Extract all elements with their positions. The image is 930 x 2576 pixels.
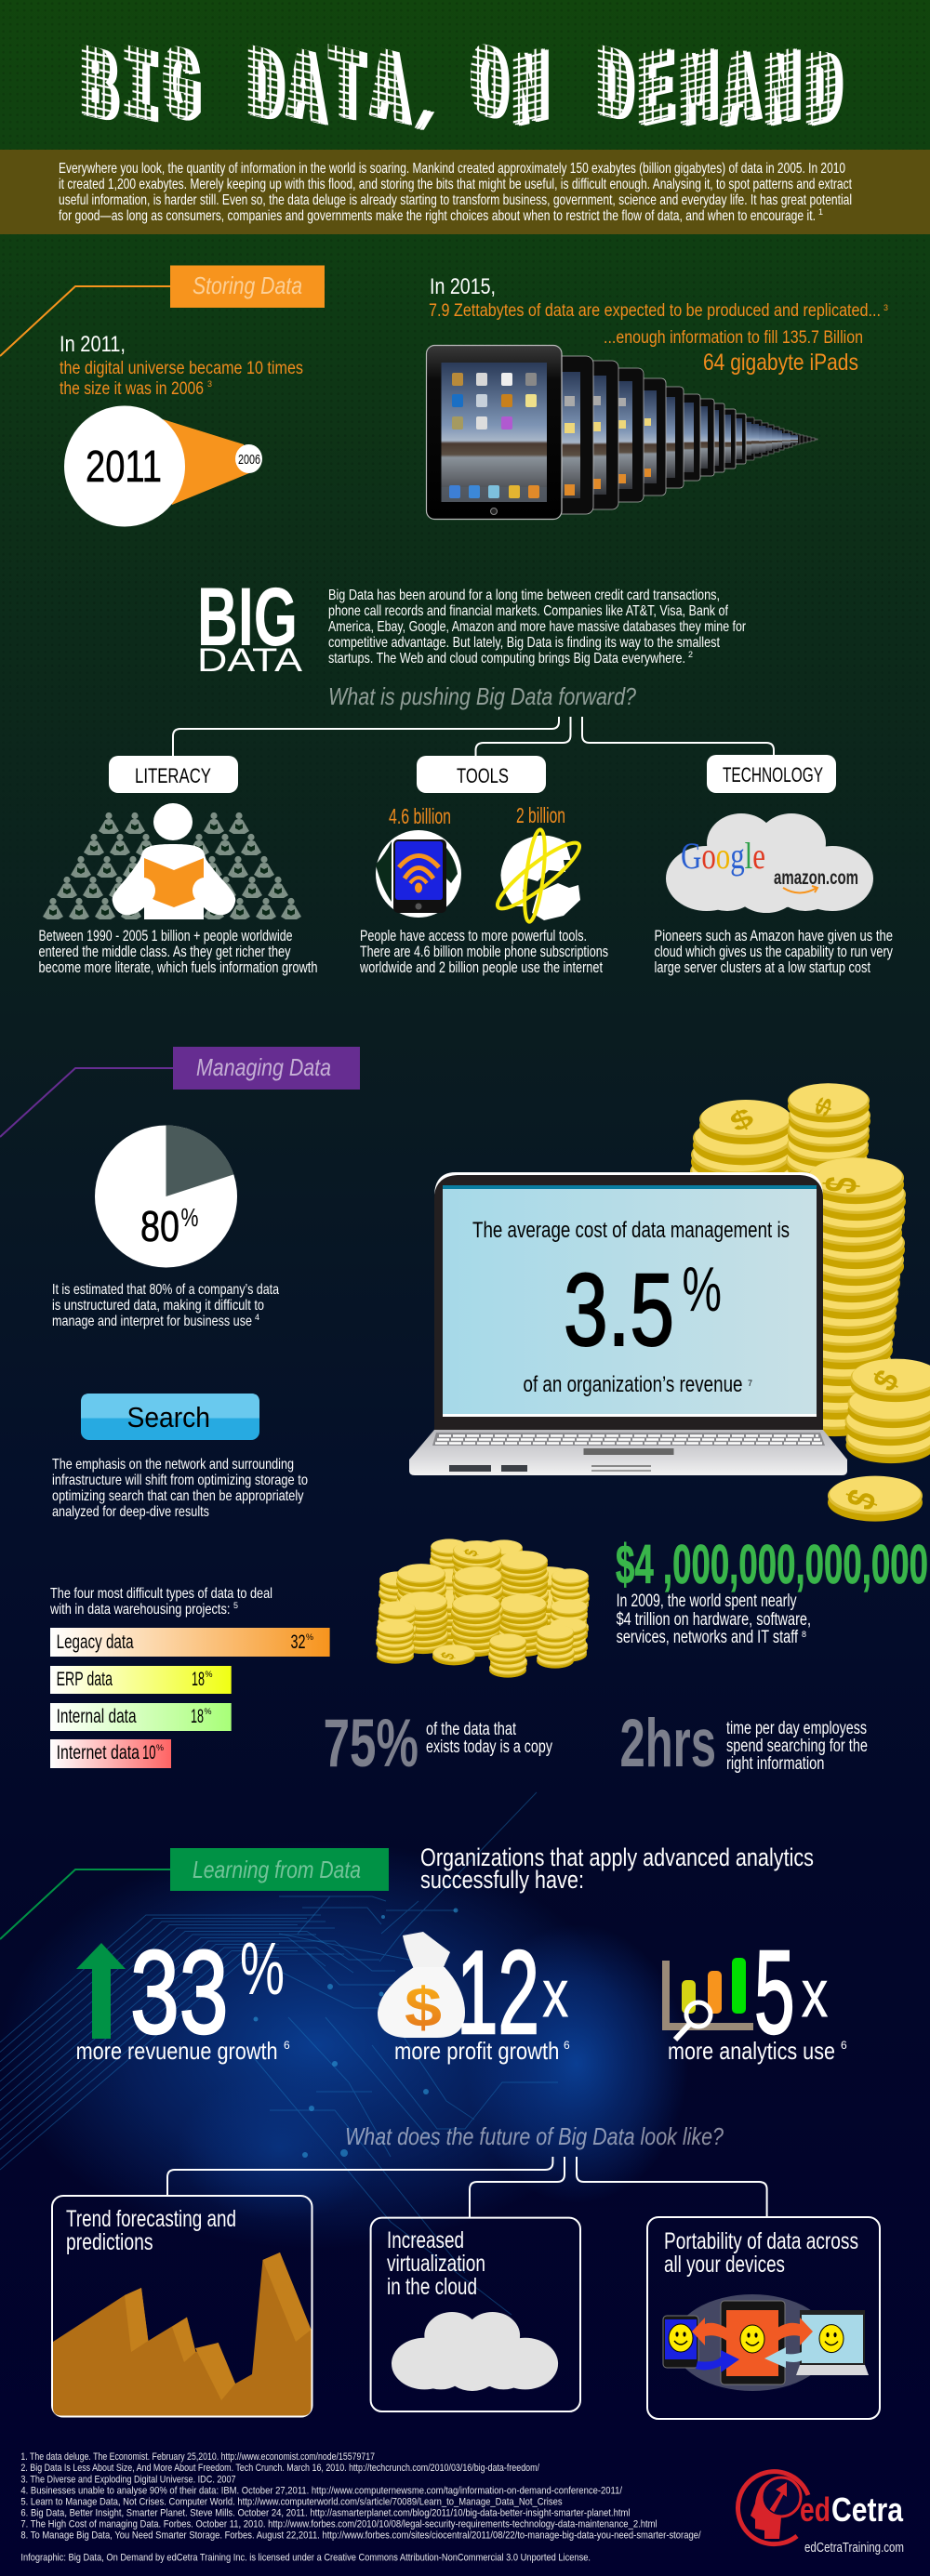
stat: 12x profit growth: 6 [564, 2039, 570, 2052]
logo: BIG DATA [197, 570, 303, 679]
text: In 2011: 3 [207, 379, 212, 389]
icon: mobile phone subscriptions globe: 4.6 billion [389, 804, 451, 828]
icon: analytics bars with magnifier [662, 1958, 753, 2040]
section tag: Storing Data: Storing Data [193, 271, 302, 299]
footnotes: 5. Learn to Manage Data, Not Crises. Computer World. http://www.computerworld.com/s/article/70089/Learn_to_Manage_Data_Not_Crises [20, 2496, 563, 2507]
icon: gold coin stacks [690, 1083, 906, 1436]
icon: mobile phone subscriptions globe [376, 804, 461, 918]
stat: 75 percent copy: exists today is a copy [426, 1737, 552, 1757]
text: search description: The emphasis on the network and surrounding [52, 1457, 294, 1473]
stat: 12x profit growth: more profit growth [394, 2037, 559, 2065]
title: Big Data, On Demand: M [679, 33, 712, 153]
question: What is pushing Big Data forward: What is pushing Big Data forward? [328, 682, 636, 710]
stat: four trillion dollars: In 2009, the world spent nearly [617, 1592, 797, 1611]
bar: ERP data: % [205, 1670, 213, 1679]
pie chart: 80 percent: % [180, 1203, 199, 1232]
icon: cloud with Google and Amazon: Google [681, 835, 765, 877]
panel: trend forecasting: predictions [66, 2229, 153, 2255]
bar: legacy data: 32 [290, 1631, 305, 1653]
text: unstructured data: It is estimated that 80% of a company’s data [52, 1282, 279, 1298]
icon: cloud with Google and Amazon: amazon.com [774, 867, 858, 889]
title: Big Data, On Demand: A [370, 31, 404, 152]
text: four difficult types: with in data warehousing projects: [49, 1602, 230, 1618]
label: Technology [707, 755, 836, 793]
text: In 2011 [60, 332, 303, 399]
text: search description: optimizing search that can then be appropriately [52, 1488, 303, 1504]
pie chart: 80 percent [95, 1125, 237, 1268]
stat: 75 percent copy: of the data that [426, 1720, 517, 1739]
text: In 2015: 3 [884, 303, 888, 312]
bar: internal data: 18 [191, 1706, 204, 1727]
title: Big Data, On Demand: I [121, 29, 154, 150]
icon: pile of coins: $ [461, 1547, 483, 1558]
icon: laptop: 3.5 [564, 1253, 674, 1367]
bar: ERP data: ERP data [57, 1669, 113, 1690]
stat: 2 hours searching: 2hrs [619, 1706, 716, 1781]
stat: 75 percent copy [324, 1706, 552, 1781]
title: Big Data, On Demand: A [286, 31, 320, 152]
logo: edCetra: ed [800, 2490, 830, 2529]
bar: internal data: % [205, 1707, 212, 1716]
text: Big Data description: 2 [688, 650, 693, 659]
bar chart: difficult data types [50, 1628, 330, 1768]
text: search description: infrastructure will shift from optimizing storage to [52, 1473, 308, 1488]
section tag: Storing Data [0, 266, 325, 356]
panel: trend forecasting: Trend forecasting and [66, 2206, 236, 2232]
stat: 5x analytics use: 5 [754, 1926, 795, 2058]
text: In 2015 [429, 274, 888, 376]
bar: internet data: 10 [142, 1742, 156, 1764]
stat: 33 percent revenue growth: 33 [130, 1926, 229, 2058]
icon: pile of coins [376, 1539, 590, 1678]
panel: portability of data: all your devices [664, 2252, 785, 2278]
logo: edCetra: Cetra [831, 2490, 904, 2529]
stat: 12x profit growth [378, 1926, 570, 2065]
title: Big Data, On Demand: D [804, 33, 837, 153]
bar: internet data: Internet data [57, 1742, 140, 1764]
future tree connectors [167, 2157, 767, 2218]
icon: laptop [409, 1172, 847, 1475]
intro band: 1 [818, 207, 823, 217]
stat: 5x analytics use: more analytics use [668, 2037, 835, 2065]
panel: trend forecasting [52, 2196, 312, 2417]
stat: 5x analytics use: 6 [841, 2039, 847, 2052]
text: Big Data description: phone call records and financial markets. Companies like AT&T, Visa, Bank of [328, 603, 728, 619]
chart: 2011 versus 2006 circles: 2011 [86, 443, 162, 492]
text: tools description: People have access to more powerful tools. [360, 928, 587, 945]
footnotes: 4. Businesses unable to analyse 90% of their data: IBM. October 27,2011. http://www.computernewsme.com/tag/information-on-demand-conference-2011/ [20, 2485, 623, 2496]
icon: gold coin stacks: $ [725, 1102, 758, 1138]
title: Big Data, On Demand: N [763, 33, 796, 153]
chart: 2011 versus 2006 circles [64, 405, 262, 526]
bar: internal data: Internal data [57, 1706, 137, 1727]
heading: advanced analytics [420, 1843, 814, 1894]
label: Literacy: LITERACY [135, 764, 211, 787]
button: Search [81, 1394, 259, 1440]
stat: 33 percent revenue growth [76, 1926, 290, 2065]
icon: cloud with Google and Amazon [666, 813, 873, 913]
text: In 2015: 64 gigabyte iPads [703, 350, 858, 376]
page background [0, 0, 930, 1671]
text: tools description: worldwide and 2 billion people use the internet [359, 959, 603, 976]
icon: laptop: 7 [748, 1379, 752, 1388]
area chart [53, 2252, 311, 2415]
logo: BIG DATA: DATA [197, 642, 303, 679]
label: Tools: TOOLS [457, 764, 509, 787]
bar: internal data [50, 1703, 232, 1731]
logo: edCetra: edCetraTraining.com [804, 2541, 904, 2556]
stat: 12x profit growth: x [543, 1958, 568, 2031]
text: In 2011: the size it was in 2006 [60, 379, 204, 399]
stat: 5x analytics use [662, 1926, 847, 2065]
stat: four trillion dollars [616, 1534, 928, 1647]
panel: portability of data: Portability of data across [664, 2228, 858, 2254]
text: technology description: large server clusters at a low startup cost [655, 959, 870, 976]
icon: foreground coins: $ [866, 1364, 907, 1397]
icon: cloud [392, 2312, 558, 2391]
icon: laptop: of an organization’s revenue [523, 1372, 742, 1397]
text: Big Data description [328, 588, 747, 667]
text: Big Data description: competitive advantage. But lately, Big Data is finding its way to the smallest [328, 635, 720, 651]
text: In 2015: ...enough information to fill 135.7 Billion [604, 328, 863, 348]
text: literacy description: entered the middle class. As they get richer they [39, 944, 291, 960]
stat: four trillion dollars: $4 trillion on hardware, software, [617, 1610, 811, 1630]
logo: BIG DATA: BIG [197, 570, 298, 663]
title: Big Data, On Demand: , [409, 72, 448, 135]
text: literacy description: become more literate, which fuels information growth [39, 959, 318, 976]
title: Big Data, On Demand: A [721, 33, 754, 153]
text: technology description [655, 928, 894, 976]
button: Search: Search [126, 1401, 210, 1433]
stat: 2 hours searching [619, 1706, 868, 1781]
panel: increased virtualization: virtualization [387, 2251, 485, 2277]
panel: portability of data [647, 2217, 880, 2419]
text: search description [52, 1457, 308, 1520]
stat: 12x profit growth: 12 [457, 1926, 539, 2058]
icon: money bag: $ [405, 1976, 442, 2039]
bar: legacy data [50, 1628, 330, 1657]
icon: receding row of iPads [426, 346, 817, 519]
text: In 2015: In 2015, [430, 274, 496, 299]
icon: laptop: The average cost of data management is [472, 1218, 790, 1243]
title: Big Data, On Demand: D [595, 29, 629, 150]
heading: advanced analytics: successfully have: [420, 1866, 584, 1894]
bar: internet data: % [156, 1743, 164, 1752]
text: tools description [359, 928, 608, 976]
title: Big Data, On Demand: G [162, 29, 195, 150]
bar: ERP data [50, 1666, 232, 1694]
stat: 33 percent revenue growth: % [240, 1927, 285, 2010]
footnotes [20, 2451, 701, 2563]
footnotes: 6. Big Data, Better Insight, Smarter Planet. Steve Mills. October 24, 2011. http://asmarterplanet.com/blog/2011/10/big-data-better-insight-smarter-planet.html [20, 2507, 630, 2518]
icon: reader and crowd [43, 803, 301, 919]
pie chart: 80 percent: 80 [140, 1202, 179, 1250]
icon: foreground coins [828, 1359, 930, 1522]
title: Big Data, On Demand: E [636, 33, 670, 153]
stat: 75 percent copy: 75% [324, 1706, 418, 1781]
icon: laptop: % [683, 1254, 722, 1325]
label: Literacy [109, 756, 238, 793]
footnotes: 8. To Manage Big Data, You Need Smarter Storage. Forbes. August 22,2011. http://www.forbes.com/sites/ciocentral/2011/08/22/to-manage-big-data-you-need-smarter-storage/ [20, 2530, 701, 2541]
stat: 2 hours searching: time per day employess [726, 1719, 867, 1738]
text: Big Data description: America, Ebay, Google, Amazon and more have massive databases they mine for [328, 619, 747, 635]
text: four difficult types: The four most difficult types of data to deal [50, 1586, 272, 1602]
section tag: Managing Data [0, 1047, 360, 1137]
bar: ERP data: 18 [192, 1669, 205, 1690]
icon: green up arrow [76, 1943, 126, 2039]
footnotes: Infographic: Big Data, On Demand by edCetra Training Inc. is licensed under a Creative Commons Attribution-NonCommercial 3.0 Unported License. [20, 2552, 591, 2563]
label: Technology: TECHNOLOGY [723, 763, 823, 786]
icon: gold coin stacks: $ [810, 1094, 837, 1120]
panel: increased virtualization: in the cloud [387, 2274, 477, 2300]
footnotes: 7. The High Cost of managing Data. Forbes. October 11, 2010. http://www.forbes.com/2010/10/08/legal-security-requirements-technology-data-maintenance_2.html [20, 2518, 658, 2530]
title: Big Data, On Demand: D [246, 29, 279, 150]
icon: internet users globe: 2 billion [516, 803, 565, 827]
text: literacy description [39, 928, 318, 976]
stat: four trillion dollars: 8 [802, 1630, 806, 1639]
stat: 33 percent revenue growth: more revuenue growth [76, 2037, 278, 2065]
panel: increased virtualization [371, 2218, 580, 2411]
bar: legacy data: % [306, 1632, 313, 1642]
footnotes: 3. The Diverse and Exploding Digital Universe. IDC. 2007 [20, 2474, 236, 2485]
text: unstructured data: 4 [255, 1313, 259, 1322]
question: What does the future look like: What does the future of Big Data look like? [345, 2122, 724, 2150]
panel: increased virtualization: Increased [387, 2227, 464, 2253]
section tag: Managing Data: Managing Data [196, 1053, 331, 1081]
stat: four trillion dollars: services, networks and IT staff [617, 1628, 799, 1647]
icon: pile of coins: $ [438, 1650, 459, 1661]
icon: devices sharing data [663, 2294, 869, 2391]
bar: legacy data: Legacy data [57, 1631, 134, 1653]
title: Big Data, On Demand: O [470, 27, 503, 148]
stat: 5x analytics use: x [802, 1958, 828, 2031]
title: Big Data, On Demand: T [327, 29, 361, 150]
icon: internet users globe [491, 803, 586, 923]
tree connectors [173, 717, 774, 756]
logo: edCetra [737, 2472, 904, 2556]
text: four difficult types: 5 [233, 1601, 238, 1610]
icon: gold coin stacks: $ [815, 1175, 868, 1195]
text: In 2011: In 2011, [60, 332, 126, 357]
text: search description: analyzed for deep-dive results [52, 1504, 209, 1520]
text: In 2011: the digital universe became 10 times [60, 359, 303, 378]
text: Big Data description: startups. The Web and cloud computing brings Big Data everywhere. [328, 651, 685, 667]
circuit board background [0, 1792, 688, 2315]
icon: money bag [378, 1932, 465, 2039]
section tag: Learning from Data: Learning from Data [193, 1856, 361, 1883]
chart: 2011 versus 2006 circles: 2006 [238, 452, 260, 468]
section tag: Learning from Data [0, 1848, 389, 1939]
text: unstructured data: manage and interpret for business use [52, 1314, 252, 1329]
stat: 33 percent revenue growth: 6 [284, 2039, 290, 2052]
intro band [0, 150, 930, 234]
title: Big Data, On Demand: N [511, 33, 544, 153]
footnotes: 2. Big Data Is Less About Size, And More About Freedom. Tech Crunch. March 16, 2010. http://techcrunch.com/2010/03/16/big-data-freedom/ [20, 2463, 540, 2474]
title: Big Data, On Demand [79, 27, 837, 153]
title: Big Data, On Demand: B [79, 29, 113, 150]
footnotes: 1. The data deluge. The Economist. February 25,2010. http://www.economist.com/node/15579717 [20, 2451, 375, 2463]
heading: advanced analytics: Organizations that apply advanced analytics [420, 1843, 814, 1871]
text: Big Data description: Big Data has been around for a long time between credit card transactions, [328, 588, 720, 603]
bar: internet data [50, 1739, 171, 1768]
text: unstructured data [52, 1282, 279, 1329]
icon: foreground coins: $ [838, 1484, 886, 1515]
text: literacy description: Between 1990 - 2005 1 billion + people worldwide [39, 928, 292, 945]
stat: 2 hours searching: spend searching for the [726, 1737, 868, 1756]
stat: 2 hours searching: right information [726, 1754, 824, 1774]
label: Tools [417, 756, 546, 793]
text: unstructured data: is unstructured data, making it difficult to [52, 1298, 264, 1314]
text: tools description: There are 4.6 billion mobile phone subscriptions [360, 944, 608, 960]
text: four difficult types [49, 1586, 272, 1618]
